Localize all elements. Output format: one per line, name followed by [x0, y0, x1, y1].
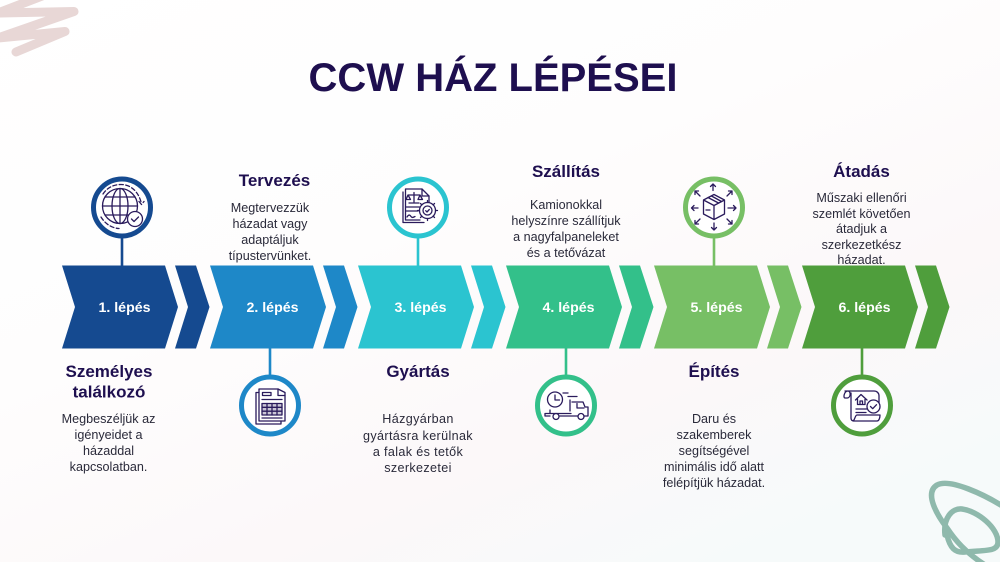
- text: step 1 description: házaddal: [83, 444, 134, 458]
- chevron: step 6: [802, 266, 918, 348]
- step 4 column: [506, 162, 654, 434]
- text: step 6 description: Műszaki ellenőri: [816, 191, 907, 205]
- connector: step 2: [269, 348, 271, 378]
- chevron: step 5: [654, 266, 770, 348]
- icon: box with arrows: [686, 179, 742, 236]
- small chevron: step 3: [471, 266, 506, 348]
- text: step 2 description: házadat vagy: [233, 217, 308, 231]
- icon: document with scales and gear: [390, 179, 446, 236]
- icon: delivery truck with clock: [538, 377, 594, 434]
- connector: step 5: [713, 236, 715, 266]
- text: step 5 description: segítségével: [679, 444, 749, 458]
- small chevron: step 2: [323, 266, 358, 348]
- heading: Személyes találkozó: Személyes: [66, 362, 152, 381]
- heading: Szállítás: Szállítás: [532, 162, 600, 181]
- heading: Személyes találkozó: találkozó: [73, 382, 145, 402]
- text: step 4 description: Kamionokkal: [530, 198, 602, 212]
- decorative pink scribble: [0, 0, 74, 52]
- chevron: step 4: [506, 266, 622, 348]
- text: step 3 description: a falak és tetők: [373, 445, 464, 459]
- chevron: step 3: [358, 266, 474, 348]
- icon: document with table: [242, 377, 298, 434]
- label: 5. lépés: 5. lépés: [690, 300, 743, 316]
- icon: house document with check: [834, 377, 890, 434]
- step 2 column: [210, 171, 358, 434]
- connector: step 4: [565, 348, 567, 378]
- text: step 5 description: Daru és: [692, 412, 736, 426]
- text: step 5 description: minimális idő alatt: [664, 460, 765, 474]
- small chevron: step 6: [915, 266, 950, 348]
- text: step 3 description: gyártásra kerülnak: [363, 429, 473, 443]
- small chevron: step 5: [767, 266, 802, 348]
- heading: Építés: Építés: [688, 362, 740, 381]
- text: step 2 description: típustervünket.: [229, 249, 311, 263]
- text: step 1 description: igényeidet a: [75, 428, 142, 442]
- connector: step 1: [121, 236, 123, 266]
- small chevron: step 1: [175, 266, 210, 348]
- chevron: step 1: [62, 266, 178, 348]
- text: step 5 description: felépítjük házadat.: [663, 476, 765, 490]
- label: 1. lépés: 1. lépés: [98, 300, 151, 316]
- step 6 column: [802, 162, 950, 434]
- text: step 6 description: szemlét követően: [812, 207, 911, 221]
- text: step 4 description: helyszínre szállítjuk: [511, 214, 621, 228]
- step 1 column: [62, 179, 210, 474]
- text: step 6 description: házadat.: [837, 253, 886, 267]
- icon: globe with check: [94, 179, 150, 236]
- text: step 3 description: Házgyárban: [382, 412, 454, 426]
- connector: step 6: [861, 348, 863, 378]
- chevron: step 2: [210, 266, 326, 348]
- text: step 5 description: szakemberek: [677, 428, 752, 442]
- small chevron: step 4: [619, 266, 654, 348]
- text: step 1 description: kapcsolatban.: [70, 460, 147, 474]
- title: CCW HÁZ LÉPÉSEI: [309, 55, 677, 100]
- connector: step 3: [417, 236, 419, 266]
- text: step 6 description: átadjuk a: [836, 222, 887, 236]
- label: 2. lépés: 2. lépés: [246, 300, 299, 316]
- text: step 3 description: szerkezetei: [384, 461, 452, 475]
- heading: Tervezés: Tervezés: [239, 171, 310, 190]
- text: step 4 description: a nagyfalpaneleket: [513, 230, 619, 244]
- label: 3. lépés: 3. lépés: [394, 300, 447, 316]
- text: step 2 description: adaptáljuk: [241, 233, 299, 247]
- text: step 1 description: Megbeszéljük az: [62, 412, 155, 426]
- text: step 6 description: szerkezetkész: [822, 238, 901, 252]
- heading: Átadás: Átadás: [833, 162, 890, 181]
- step 3 column: [358, 179, 506, 475]
- text: step 2 description: Megtervezzük: [231, 201, 310, 215]
- label: 4. lépés: 4. lépés: [542, 300, 595, 316]
- heading: Gyártás: Gyártás: [386, 362, 450, 381]
- step 5 column: [654, 179, 802, 490]
- text: step 4 description: és a tetővázat: [527, 246, 606, 260]
- decorative teal loops: [932, 483, 1000, 562]
- label: 6. lépés: 6. lépés: [838, 300, 891, 316]
